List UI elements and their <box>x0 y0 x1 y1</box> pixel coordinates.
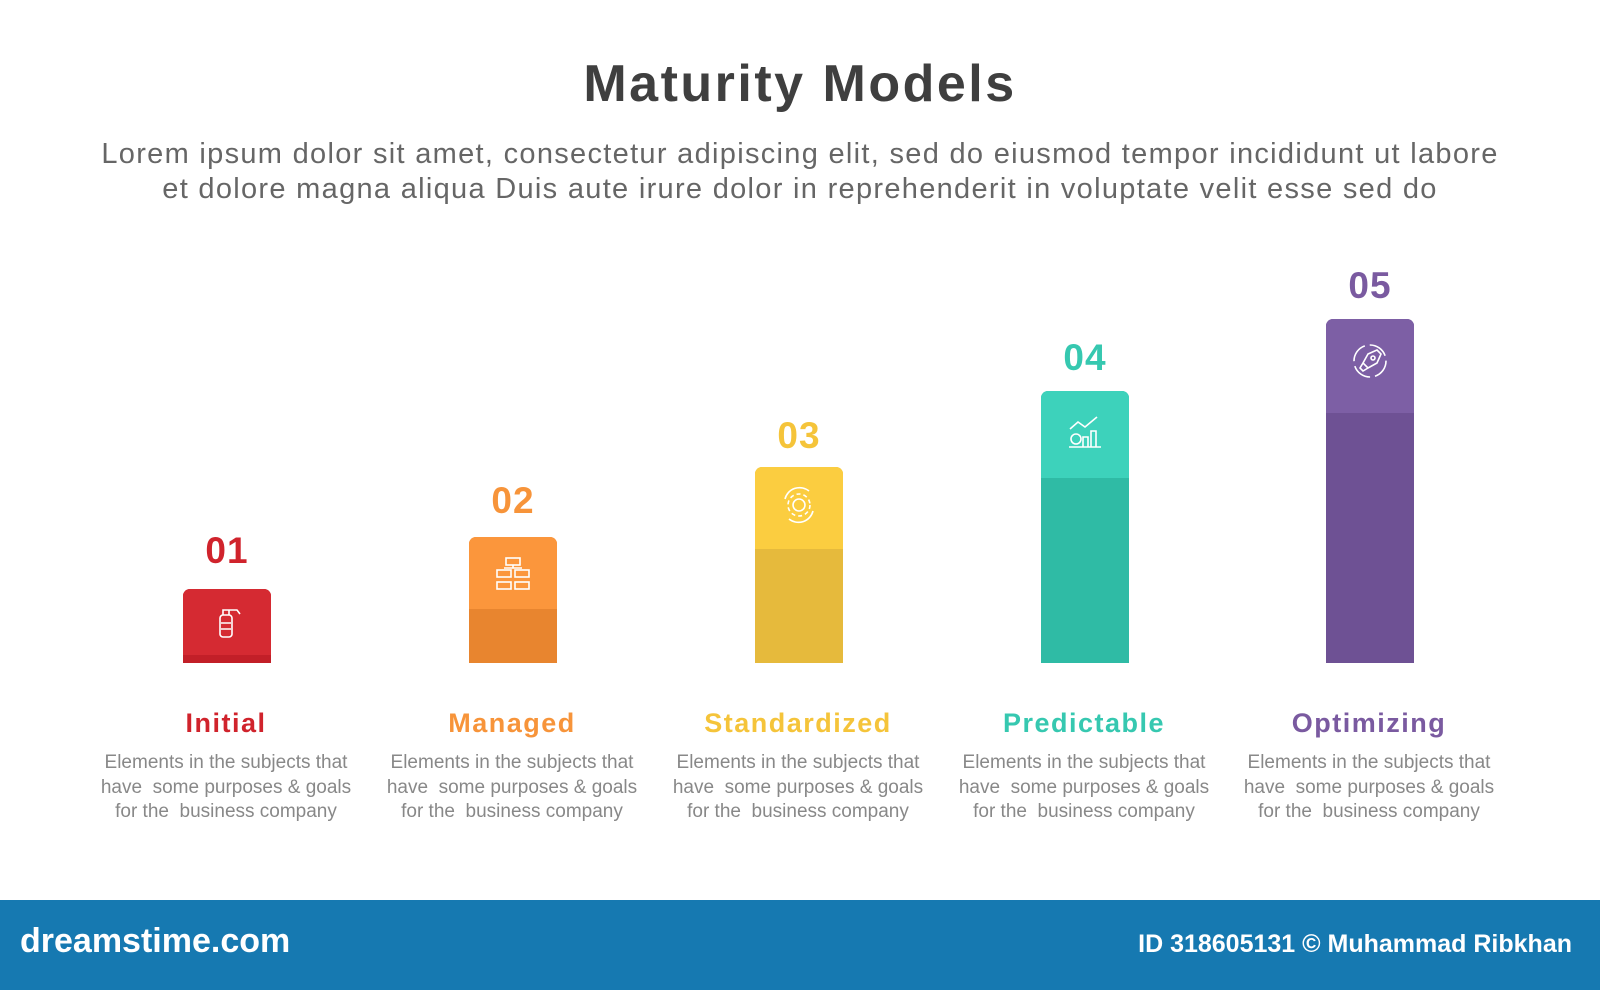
description <box>673 752 923 822</box>
icon: analytics <box>1069 416 1101 448</box>
subtitle <box>101 138 1499 205</box>
step 1 <box>101 530 351 822</box>
label: Initial <box>185 708 266 738</box>
description <box>101 752 351 822</box>
number 02: 02 <box>491 480 535 521</box>
label: Optimizing <box>1292 708 1446 738</box>
description: have some purposes & goals <box>673 776 923 798</box>
description: have some purposes & goals <box>959 776 1209 798</box>
number 03: 03 <box>777 415 821 456</box>
description: have some purposes & goals <box>387 776 637 798</box>
bar 4 <box>1041 391 1129 663</box>
step 4 <box>959 337 1209 822</box>
description: for the business company <box>687 801 909 822</box>
description: have some purposes & goals <box>101 776 351 798</box>
label: Managed <box>448 708 576 738</box>
description: Elements in the subjects that <box>105 752 347 773</box>
description <box>959 752 1209 822</box>
bar 2 <box>469 537 557 663</box>
label: Standardized <box>704 708 892 738</box>
step 2 <box>387 480 637 822</box>
footer <box>0 900 1600 990</box>
description: have some purposes & goals <box>1244 776 1494 798</box>
description: for the business company <box>973 801 1195 822</box>
description: Elements in the subjects that <box>1248 752 1490 773</box>
number 01: 01 <box>205 530 249 571</box>
description: for the business company <box>115 801 337 822</box>
description: Elements in the subjects that <box>963 752 1205 773</box>
footer logo: dreamstime.com <box>20 922 290 960</box>
description <box>387 752 637 822</box>
bar 3 <box>755 467 843 663</box>
subtitle: et dolore magna aliqua Duis aute irure dolor in reprehenderit in voluptate velit esse sed do <box>162 173 1438 205</box>
step 5 <box>1244 265 1494 822</box>
description: for the business company <box>1258 801 1480 822</box>
footer credit: ID 318605131 © Muhammad Ribkhan <box>1138 930 1572 958</box>
icon: hierarchy <box>496 557 530 590</box>
number 04: 04 <box>1063 337 1107 378</box>
number 05: 05 <box>1348 265 1392 306</box>
description: Elements in the subjects that <box>391 752 633 773</box>
description <box>1244 752 1494 822</box>
bar 5 <box>1326 319 1414 663</box>
bar 1 <box>183 589 271 663</box>
icon: gear cycle <box>784 486 814 524</box>
icon: rocket <box>1353 344 1387 378</box>
icon: extinguisher <box>219 609 240 638</box>
step 3 <box>673 415 923 822</box>
description: for the business company <box>401 801 623 822</box>
title: Maturity Models <box>583 55 1017 113</box>
description: Elements in the subjects that <box>677 752 919 773</box>
label: Predictable <box>1003 708 1165 738</box>
subtitle: Lorem ipsum dolor sit amet, consectetur adipiscing elit, sed do eiusmod tempor incididunt ut labore <box>101 138 1499 170</box>
